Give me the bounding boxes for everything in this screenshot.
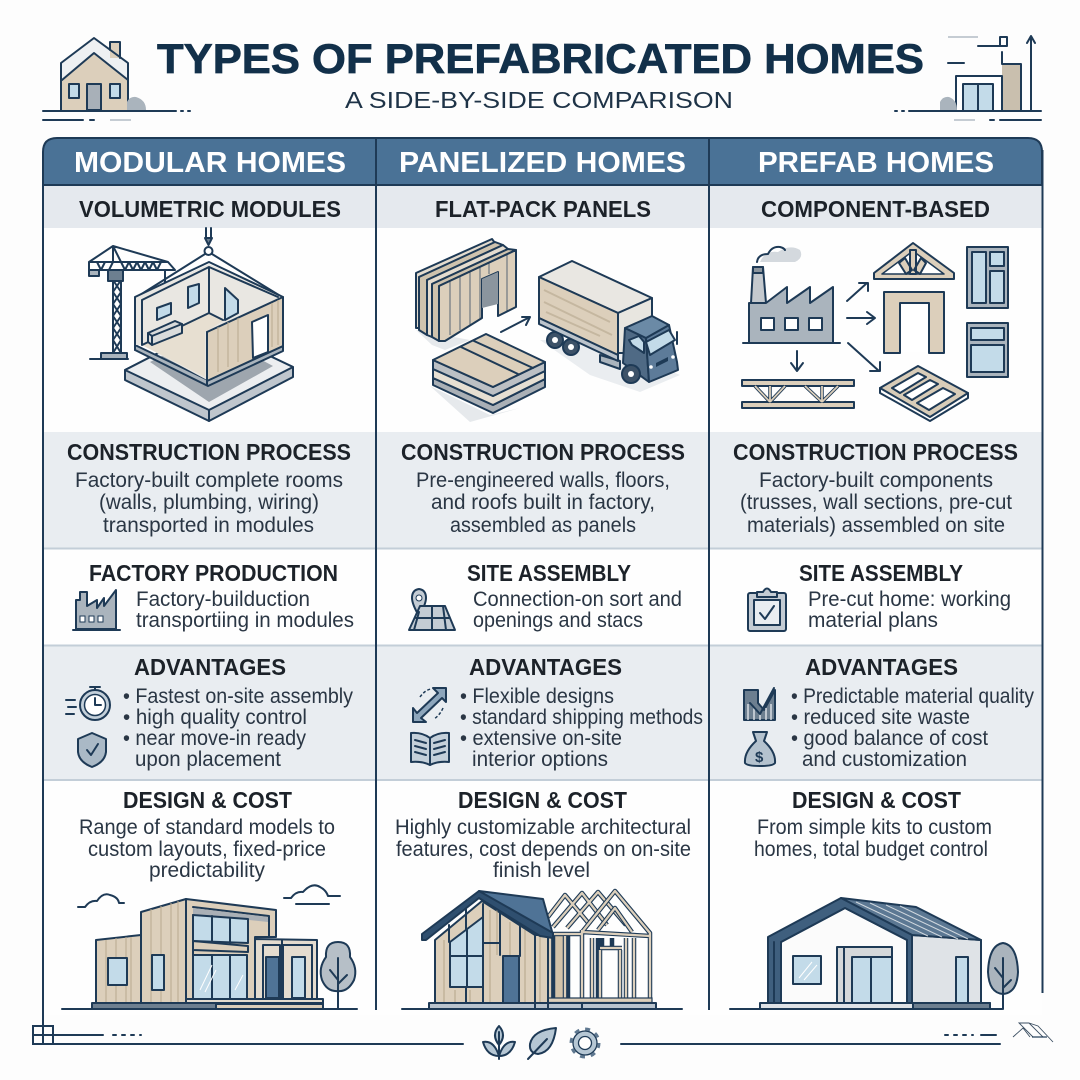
block: modular design and cost: custom layouts, fixed-price (88, 838, 326, 861)
title: TYPES OF PREFABRICATED HOMES (157, 35, 924, 82)
block: prefab advantages: • Predictable material quality (791, 685, 1034, 708)
icon: money bag (745, 732, 775, 766)
icon: header building right (895, 36, 1041, 120)
block: panelized design and cost: Highly customizable architectural (395, 816, 691, 839)
block: panelized construction process: assembled as panels (450, 514, 636, 537)
block: prefab advantages (791, 654, 1034, 771)
block: panelized construction process: CONSTRUCTION PROCESS (401, 439, 685, 465)
block: panelized construction process: and roofs built in factory, (431, 491, 655, 514)
block: panelized advantages: ADVANTAGES (469, 654, 622, 680)
block: factory production: transportiing in modules (136, 609, 354, 632)
block: prefab site assembly: Pre-cut home: working (808, 588, 1011, 611)
column heading: panelized homes: PANELIZED HOMES (399, 147, 686, 179)
block: prefab site assembly: SITE ASSEMBLY (799, 560, 963, 586)
block: prefab site assembly (799, 560, 1011, 632)
block: modular advantages: • Fastest on-site assembly (123, 685, 353, 708)
illustration: prefab gabled house (730, 898, 1018, 1009)
block: panelized site assembly: Connection-on sort and (473, 588, 682, 611)
column heading: modular homes: MODULAR HOMES (74, 147, 346, 179)
illustration: factory producing components (742, 243, 1008, 421)
block: modular advantages: ADVANTAGES (134, 654, 286, 680)
icon: shield check (78, 733, 106, 767)
illustration: flat-pack panels and truck (416, 239, 680, 422)
block: panelized construction process (401, 439, 685, 537)
block: prefab design and cost: From simple kits to custom (757, 816, 992, 839)
icon: flexible arrows (413, 688, 446, 722)
subtitle: A SIDE-BY-SIDE COMPARISON (345, 87, 733, 113)
block: prefab site assembly: material plans (808, 609, 938, 632)
header band (43, 138, 1042, 185)
block: panelized construction process: Pre-engineered walls, floors, (416, 469, 670, 492)
icon: gear (571, 1029, 599, 1057)
block: factory production (89, 560, 354, 632)
block: modular design and cost: DESIGN & COST (123, 787, 292, 813)
block: modular design and cost: Range of standard models to (79, 816, 335, 839)
icon: clipboard checklist (748, 588, 786, 631)
block: prefab design and cost: homes, total budget control (754, 838, 988, 861)
block: modular advantages: • near move-in ready (123, 727, 306, 750)
block: prefab design and cost: DESIGN & COST (792, 787, 961, 813)
block: modular construction process: Factory-built complete rooms (75, 469, 343, 492)
block: prefab construction process: CONSTRUCTION PROCESS (733, 439, 1018, 465)
block: modular design and cost (79, 787, 335, 882)
block: factory production: Factory-builduction (136, 588, 310, 611)
block: modular construction process: CONSTRUCTION PROCESS (67, 439, 351, 465)
icon: leaf (528, 1028, 556, 1059)
block: panelized advantages: • extensive on-site (460, 727, 622, 750)
block: panelized site assembly (467, 560, 682, 632)
icon: quality chart with check (744, 688, 775, 720)
block: panelized design and cost: features, cost depends on on-site (396, 838, 691, 861)
block: modular advantages: • high quality control (123, 706, 307, 729)
block: panelized design and cost: DESIGN & COST (458, 787, 627, 813)
illustration: crane lifting module onto foundation (89, 228, 293, 421)
icon: stopwatch (66, 687, 110, 720)
block: modular construction process (67, 439, 351, 537)
block: panelized design and cost: finish level (493, 859, 590, 882)
block: prefab advantages: • good balance of cost (791, 727, 988, 750)
subheading: component-based: COMPONENT-BASED (761, 196, 990, 222)
block: panelized site assembly: SITE ASSEMBLY (467, 560, 631, 586)
icon: map pin and plan (409, 589, 455, 630)
illustration: modular modern house (62, 885, 357, 1009)
block: prefab construction process (733, 439, 1018, 537)
block: factory production: FACTORY PRODUCTION (89, 560, 338, 586)
block: panelized advantages (460, 654, 703, 771)
column heading: prefab homes: PREFAB HOMES (758, 147, 994, 179)
icon: small mountains (1013, 1023, 1053, 1042)
column dividers in header (376, 138, 709, 186)
block: prefab advantages: and customization (802, 748, 967, 771)
illustration: panelized house with open frame (402, 891, 682, 1009)
icon: small factory (73, 590, 120, 630)
block: prefab construction process: materials) assembled on site (747, 514, 1005, 537)
block: prefab construction process: (trusses, wall sections, pre-cut (740, 491, 1012, 514)
block: modular advantages: upon placement (135, 748, 281, 771)
icon: plant sprout (483, 1026, 515, 1059)
block: panelized advantages: • standard shipping methods (460, 706, 703, 729)
comparison table background (43, 138, 1042, 1044)
icon: header house left (43, 38, 190, 120)
footer line left with corner square (33, 1026, 463, 1044)
block: panelized design and cost (395, 787, 691, 882)
icon: money bag: $ (755, 749, 764, 766)
subheading: flat-pack panels: FLAT-PACK PANELS (435, 196, 651, 222)
footer line right (621, 1035, 1000, 1044)
block: prefab advantages: ADVANTAGES (805, 654, 958, 680)
block: prefab design and cost (754, 787, 992, 861)
block: modular advantages (123, 654, 353, 771)
block: prefab advantages: • reduced site waste (791, 706, 970, 729)
icon: open book (411, 733, 449, 765)
block: modular design and cost: predictability (149, 859, 265, 882)
block: panelized advantages: interior options (472, 748, 608, 771)
block: panelized advantages: • Flexible designs (460, 685, 614, 708)
block: modular construction process: transported in modules (103, 514, 314, 537)
block: panelized site assembly: openings and stacs (473, 609, 643, 632)
block: prefab construction process: Factory-built components (759, 469, 993, 492)
subheading: volumetric modules: VOLUMETRIC MODULES (79, 196, 341, 222)
block: modular construction process: (walls, plumbing, wiring) (99, 491, 319, 514)
